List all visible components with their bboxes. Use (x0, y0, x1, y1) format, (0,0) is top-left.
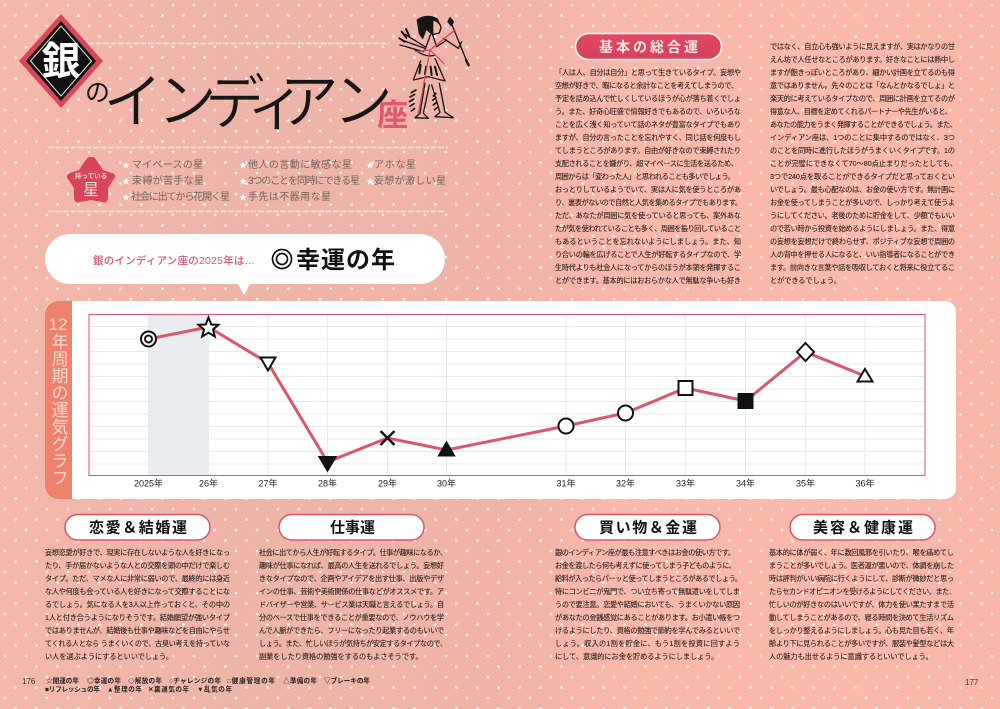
text: shopping and money: 給料が入ったらパーッと使ってしまうところがあるでしょう。 (555, 574, 742, 583)
heading: 買い物＆金運 (575, 514, 720, 540)
text: basic fortune column 2: ので若い時から投資を始めるようにしましょう。また、得意 (770, 224, 955, 233)
text: shopping and money: うので要注意。恋愛や結婚においても、うまくいかない原因 (555, 600, 740, 609)
text: basic fortune column 2: 得意な人、目標を定めてくれるパートナーや先生がいると、 (770, 107, 952, 116)
text: basic fortune column 1: とができます。基本的にはおおらかな人で無駄な争いも好き (555, 276, 741, 285)
axis labels: 27年 (258, 478, 278, 488)
text: shopping and money: しょう。収入の1割を貯金に、もう1割を投資に回すよう (555, 639, 740, 648)
legend: fortune year symbols: ▲整理の年 (107, 684, 142, 694)
text: basic fortune column 2: 意ではありません。先々のことは「なんとかなるでしょ」と (770, 81, 955, 90)
axis labels: 35年 (796, 478, 815, 488)
text: basic fortune column 1: ただ、あなたが周囲に気を使っていると思っても、案外あな (555, 211, 741, 220)
list: stars held: アホな星 (374, 159, 416, 171)
legend: fortune year symbols: □健康管理の年 (227, 676, 275, 685)
list: stars held: ★ (122, 193, 130, 202)
text: shopping and money: 特にコンビニが鬼門で、つい立ち寄って無駄遣いをしてしま (555, 587, 740, 596)
icon: star badge 持っている星: 星 (83, 182, 99, 199)
text: beauty and health: 時は評判がいい病院に行くようにして、診断が微妙だと思っ (769, 574, 954, 583)
title: のインディアン座: インディアン (103, 68, 393, 138)
text: basic fortune column 2: あなたの能力をうまく発揮することができるでしょう。また、 (770, 120, 957, 129)
text: beauty and health: たらセカンドオピニオンを受けるようにしてください。また、 (769, 587, 956, 596)
text: basic fortune column 1: 予定を詰め込んで忙しくしているほうが心が落ち着くでしょ (555, 94, 741, 103)
legend: fortune year symbols: ◎幸運の年 (87, 676, 121, 685)
list: stars held: 社会に出てから花開く星 (131, 190, 230, 203)
text: basic fortune column 1: う。また、好奇心旺盛で情報好きでもあるので、いろいろな (555, 107, 741, 116)
panel: 12-year fortune graph (45, 301, 956, 499)
legend: fortune year symbols: ☆開運の年 (46, 676, 79, 685)
text: basic fortune column 2: えん坊で人任せなところがあります。好きなことには熱中し (770, 55, 955, 64)
axis labels: 30年 (437, 478, 456, 488)
text: love and marriage: い人を選ぶようにするといいでしょう。 (45, 652, 173, 661)
heading: 基本の総合運: 基本の総合運 (599, 39, 698, 55)
callout: 2025 fortune (45, 234, 445, 295)
list: stars held: 3つのことを同時にできる星 (248, 175, 360, 187)
text: shopping and money (555, 548, 742, 661)
text: basic fortune column 2: ことが完璧にできなくて70～80点止まりだったとしても、 (770, 159, 957, 168)
text: love and marriage: るでしょう。気になる人を3人以上作っておくと、その中の (45, 600, 230, 609)
legend: fortune year symbols: ▽ブレーキの年 (324, 676, 370, 685)
axis labels (134, 478, 875, 488)
text: beauty and health: まうことが多いでしょう。医者運が悪いので、体調を崩した (769, 561, 954, 570)
axis labels: 34年 (736, 478, 755, 488)
list: stars held: ★ (122, 161, 130, 170)
axis labels: 31年 (556, 478, 576, 488)
list: stars held (122, 158, 446, 203)
legend: fortune year symbols: ◇解放の年 (128, 676, 162, 685)
text: work: ドバイザーや営業、サービス業は天職と言えるでしょう。自 (259, 600, 444, 609)
text: beauty and health (769, 548, 956, 661)
text: shopping and money: があなたの金銭感覚にあることがあります。お小遣い帳をつ (555, 613, 740, 622)
text: basic fortune column 2: お金を使ってしまうことが多いので、しっかり考えて使うよ (770, 198, 955, 207)
callout: 2025 fortune: 銀のインディアン座の2025年は… (93, 254, 255, 267)
badge: 銀 diamond (19, 14, 103, 108)
text: work: 副業をしたり資格の勉強をするのもよさそうです。 (259, 652, 423, 661)
text: basic fortune column 1: おっとりしているようでいて、実は人に気を使うところがあ (555, 185, 741, 194)
list: stars held: ★ (239, 193, 247, 202)
legend: fortune year symbols: ✕裏運気の年 (148, 684, 189, 694)
icon: Indian figure with constellation (399, 16, 469, 118)
text: beauty and health: 基本的に体が弱く、年に数回風邪を引いたり、喉を痛めてし (769, 548, 954, 557)
text: work: インの仕事、芸術や美術関係の仕事などがオススメです。ア (259, 587, 444, 596)
list: stars held: 束縛が苦手な星 (132, 174, 204, 187)
list: stars held: 妄想が激しい星 (374, 174, 446, 187)
heading: 恋愛＆結婚運: 恋愛＆結婚運 (89, 518, 187, 536)
page number: 177: 177 (965, 678, 979, 687)
text: basic fortune column 1: ことを広く浅く知っていて話のネタが豊富なタイプでもあり (555, 120, 741, 129)
text: basic fortune column 2: うにしてください。老後のために貯金をして、少額でもいい (770, 211, 955, 220)
text: basic fortune column 1: り合いの輪を広げることで人生が好転するタイプなので、学 (555, 250, 741, 259)
text: shopping and money: にして、意識的にお金を貯めるようにしましょう。 (555, 652, 718, 661)
list: stars held: 他人の言動に敏感な星 (248, 158, 352, 171)
list: stars held: ★ (122, 177, 130, 186)
markers (141, 318, 872, 470)
heading: 買い物＆金運: 買い物＆金運 (599, 518, 697, 536)
text: basic fortune column 2: とができるでしょう。 (770, 276, 841, 285)
icon: star badge 持っている星 (67, 157, 115, 202)
text: love and marriage: てくれる人となら うまくいくので、古臭い考えを持っていな (45, 639, 230, 648)
text: basic fortune column 1: てしまうところがあります。自由が好きなので束縛されたり (555, 146, 741, 155)
text: work (259, 548, 447, 661)
heading: 仕事運 (279, 514, 424, 540)
badge: 銀 diamond: 銀 (41, 41, 81, 84)
tab heading: 12年周期の運気グラフ: 年周期の運気グラフ (48, 333, 68, 486)
heading: 恋愛＆結婚運 (65, 514, 210, 540)
title: のインディアン座: 座 (377, 98, 408, 133)
heading: 仕事運: 仕事運 (330, 518, 375, 536)
page number: 176: 176 (22, 677, 36, 686)
text: basic fortune column 1: 生時代よりも社会人になってからのほうが本領を発揮するこ (555, 263, 741, 272)
text: love and marriage: な人や何度も会っている人を好きになって交際することにな (45, 587, 230, 596)
text: basic fortune column 1: ますが、自分の言ったことを忘れやすく、同じ話を何度もし (555, 133, 741, 142)
text: basic fortune column 2: のことを同時に進行したほうがうまくいくタイプです。1の (770, 146, 955, 155)
text: basic fortune column 2: 人の背中を押せる人になると、いい指導者になることができ (770, 250, 955, 259)
text: basic fortune column 1: たが気を使われていることも多く、周囲を振り回していること (555, 224, 741, 233)
text: beauty and health: 齢より下に見られることが多いですが、服装や髪型などは大 (769, 639, 954, 648)
callout: 2025 fortune: 幸運の年 (296, 247, 395, 274)
text: love and marriage: 1人と付き合うようになりそうです。結婚願望が強いタイプ (45, 613, 231, 622)
text: work: しょう。また、忙しいほうが気持ちが安定するタイプなので、 (259, 639, 447, 648)
text: love and marriage: たり、手が届かないような人との交際を頭の中だけで楽しむ (45, 561, 230, 570)
text: basic fortune column 1: もあるということを忘れないようにしましょう。また、知 (555, 237, 741, 246)
axis labels: 26年 (199, 478, 218, 488)
text: work: 社会に出てから人生が好転するタイプ。仕事が趣味になるか、 (259, 548, 447, 557)
list: stars held: ★ (239, 161, 247, 170)
list: stars held: ★ (366, 177, 374, 186)
legend: fortune year symbols: △準備の年 (283, 676, 317, 685)
text: shopping and money: 銀のインディアン座が最も注意すべきはお金の使い方です。 (555, 548, 735, 557)
text: beauty and health: 動してしまうことがあるので、寝る時間を決めて生活リズム (769, 613, 954, 622)
axis labels: 29年 (378, 478, 397, 488)
text: basic fortune column 2: ますが飽きっぽいところがあり、細かい計画を立てるのも得 (770, 68, 955, 77)
text: shopping and money: お金を渡したら何も考えずに使ってしまう子どものように、 (555, 561, 736, 570)
text: basic fortune column 2: 楽天的に考えているタイプなので、周囲に計画を立てるのが (770, 94, 955, 103)
list: stars held: 手先は不器用な星 (248, 190, 331, 203)
title: のインディアン座: の (85, 79, 110, 107)
text: work: 分のペースで仕事をできることが重要なので、ノウハウを学 (259, 613, 444, 622)
text: basic fortune column 2: いでしょう。最も心配なのは、お金の使い方です。無計画に (770, 185, 955, 194)
text: beauty and health: 人の魅力も出せるように意識するといいでしょう。 (769, 652, 933, 661)
text: basic fortune column 2: 3つで240点を取ることができるタイプだと思っておくとい (770, 172, 955, 181)
list: stars held: マイペースの星 (132, 159, 203, 171)
legend: fortune year symbols (45, 676, 370, 694)
legend: fortune year symbols: ○チャレンジの年 (169, 676, 221, 685)
text: basic fortune column 1 (555, 68, 742, 285)
heading: 基本の総合運 (576, 34, 722, 60)
text: love and marriage: 妄想恋愛が好きで、現実に存在しないような人を好きになっ (45, 548, 230, 557)
chart: fortune line (89, 314, 925, 488)
text: love and marriage: ではありませんが、結婚後も仕事や趣味などを自由にやらせ (45, 626, 230, 635)
list: stars held: ★ (239, 177, 247, 186)
axis labels: 28年 (318, 478, 337, 488)
text: basic fortune column 1: 支配されることを嫌がり、超マイペースに生活を送るため、 (555, 159, 738, 168)
heading: 美容＆健康運 (790, 514, 935, 540)
legend: fortune year symbols: ▼乱気の年 (197, 684, 232, 694)
text: basic fortune column 2: ではなく、自立心も強いように見えますが、実はかなりの甘 (770, 42, 955, 51)
text: basic fortune column 2: インディアン座は、1つのことに集中するのではなく、3つ (770, 133, 955, 142)
text: basic fortune column 1: り、裏表がないので自然と人気を集めるタイプでもあります。 (555, 198, 742, 207)
text: basic fortune column 1: 周囲からは「変わった人」と思われることも多いでしょう。 (555, 172, 735, 181)
tab heading: 12年周期の運気グラフ: 12 (49, 315, 67, 334)
text: basic fortune column 2: ます。前向きな言葉や話を吸収しておくと将来に役立てるこ (770, 263, 955, 272)
text: shopping and money: けるようにしたり、資格の勉強で節約を学んでみるといいで (555, 626, 740, 635)
axis labels: 2025年 (134, 478, 163, 488)
axis labels: 32年 (616, 478, 635, 488)
axis labels: 33年 (676, 478, 695, 488)
text: basic fortune column 1: 空想が好きで、暇になると余計なことを考えてしまうので、 (555, 81, 738, 90)
text: basic fortune column 2: の妄想を妄想だけで終わらせず、ポジティブな妄想で周囲の (770, 237, 955, 246)
text: beauty and health: をしっかり整えるようにしましょう。心も見た目も若く、年 (769, 626, 954, 635)
axis labels: 36年 (855, 478, 875, 488)
text: work: 趣味が仕事になれば、最高の人生を送れるでしょう。妄想好 (259, 561, 444, 570)
list: stars held: ★ (366, 161, 374, 170)
text: work: きなタイプなので、企画やアイデアを出す仕事、出版やデザ (259, 574, 444, 583)
text: love and marriage (45, 548, 231, 661)
text: work: んで人脈ができたら、フリーになったり起業するのもいいで (259, 626, 444, 635)
text: basic fortune column 2 (770, 42, 957, 285)
legend: fortune year symbols: ■リフレッシュの年 (45, 684, 100, 694)
icon: star badge 持っている星: 持っている (75, 171, 107, 180)
text: basic fortune column 1: 「人は人、自分は自分」と思って生きているタイプ。妄想や (555, 68, 741, 77)
text: beauty and health: 忙しいのが好きなのはいいですが、体力を使い果たすまで活 (769, 600, 954, 609)
heading: 美容＆健康運: 美容＆健康運 (813, 518, 913, 536)
text: love and marriage: タイプ。ただ、マメな人に非常に弱いので、最終的には身近 (45, 574, 230, 583)
